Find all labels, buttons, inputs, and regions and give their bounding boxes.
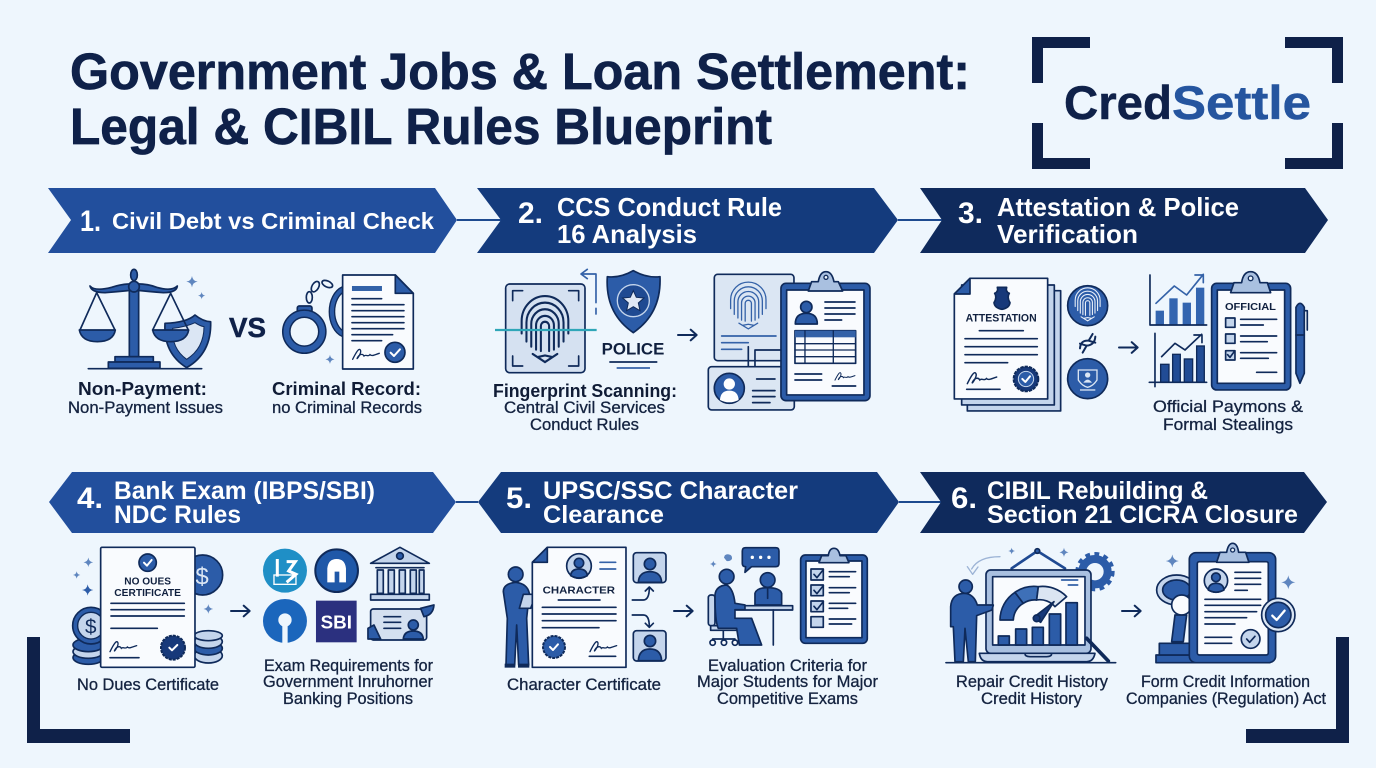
banner 6 <box>920 472 1327 533</box>
icon: no dues certificate with coins: $ <box>85 616 97 639</box>
caption: exam requirements <box>263 657 433 708</box>
caption: non-payment <box>68 378 223 417</box>
icon: handcuffs and record <box>286 275 413 369</box>
panel: 4 bank exam ndc rules <box>49 472 456 708</box>
icon: scales with shield <box>79 269 211 369</box>
logo: CredSettle <box>1032 37 1343 169</box>
icon: evaluation checklist <box>801 548 867 643</box>
banner 2: 2. <box>518 197 543 230</box>
banner 5 <box>478 472 899 533</box>
logo: CredSettle: Settle <box>1172 76 1311 129</box>
connector: 1 to 2 <box>457 219 501 221</box>
caption: credit information act: Form Credit Information <box>1141 673 1310 691</box>
icon: interview scene <box>708 548 793 645</box>
panel: 6 cibil rebuilding and section 21 <box>920 472 1327 708</box>
caption: criminal record: no Criminal Records <box>272 399 422 417</box>
title: Legal & CIBIL Rules Blueprint <box>70 98 772 155</box>
vs label: VS <box>229 312 266 343</box>
caption: official paymons: Official Paymons & <box>1153 398 1303 416</box>
icon: no dues certificate with coins: $ <box>195 563 209 590</box>
icon: banks and exam logos <box>263 547 434 643</box>
caption: fingerprint scanning: Conduct Rules <box>530 416 639 434</box>
icon: official clipboard and pen <box>1212 272 1307 390</box>
arrow <box>1122 606 1141 616</box>
logo: CredSettle: Cred <box>1064 76 1172 129</box>
caption: exam requirements: Banking Positions <box>283 690 413 708</box>
icon: attestation document: ATTESTATION <box>966 313 1037 325</box>
caption: repair credit history: Credit History <box>981 690 1083 708</box>
banner 3: Attestation & Police <box>997 192 1239 222</box>
caption: credit information act: Companies (Regulation) Act <box>1126 690 1326 708</box>
caption: official paymons: Formal Stealings <box>1163 416 1293 434</box>
caption: non-payment: Non-Payment Issues <box>68 399 223 417</box>
panel: 5 upsc ssc character clearance <box>478 472 899 708</box>
banner 3 <box>920 188 1328 253</box>
banner 1: 1. <box>80 205 101 238</box>
icon: regulation clipboard <box>1156 543 1295 663</box>
caption: evaluation criteria: Major Students for Major <box>697 673 879 691</box>
banner 2 <box>477 188 898 253</box>
panel: 2 ccs conduct rule <box>477 188 898 434</box>
banner 3: Verification <box>997 219 1138 249</box>
caption: credit information act <box>1126 673 1326 708</box>
banner 1 <box>48 188 457 253</box>
caption: fingerprint scanning <box>493 380 677 434</box>
caption: fingerprint scanning: Central Civil Services <box>504 399 665 417</box>
caption: repair credit history: Repair Credit History <box>956 673 1109 691</box>
corner bracket: bottom left <box>27 637 130 743</box>
icon: police badge <box>602 271 664 368</box>
corner bracket: bottom right <box>1246 637 1349 743</box>
icon: credit score repair <box>946 548 1116 663</box>
arrow <box>678 330 697 340</box>
icon: fingerprint scanner <box>495 269 597 373</box>
banner 5: 5. <box>506 482 532 515</box>
banner 4: 4. <box>77 482 103 515</box>
caption: non-payment: Non-Payment: <box>78 378 207 399</box>
arrow <box>1119 342 1138 353</box>
caption: evaluation criteria: Evaluation Criteria for <box>708 657 868 675</box>
icon: police badge: POLICE <box>602 339 664 358</box>
caption: repair credit history <box>956 673 1109 708</box>
icon: no dues certificate with coins: NO OUES <box>124 576 172 587</box>
caption: no dues certificate: No Dues Certificate <box>77 676 219 694</box>
banner 6: 6. <box>951 482 977 515</box>
connector: 4 to 5 <box>456 501 478 503</box>
banner 3: 3. <box>958 197 983 230</box>
icon: banks and exam logos: SBI <box>321 611 352 632</box>
title: Government Jobs & Loan Settlement: <box>70 43 970 100</box>
panel: 1 civil debt vs criminal check <box>48 188 457 417</box>
icon: fingerprint records and clipboard <box>708 272 870 410</box>
icon: attestation document <box>954 278 1061 411</box>
panel: 3 attestation and police verification <box>920 188 1328 434</box>
icon: no dues certificate with coins: CERTIFICATE <box>114 588 182 599</box>
caption: exam requirements: Government Inruhorner <box>263 673 433 691</box>
banner 1: Civil Debt vs Criminal Check <box>112 208 434 234</box>
banner 5: Clearance <box>543 501 664 529</box>
caption: criminal record: Criminal Record: <box>272 378 421 399</box>
arrow <box>674 606 693 616</box>
icon: referee portraits <box>632 553 666 661</box>
connector: 2 to 3 <box>898 219 942 221</box>
banner 2: CCS Conduct Rule <box>557 192 782 222</box>
banner 5: UPSC/SSC Character <box>543 477 798 505</box>
title <box>70 43 970 155</box>
icon: no dues certificate with coins <box>73 547 223 667</box>
icon: person with character certificate: CHARACTER <box>543 585 616 596</box>
caption: criminal record <box>272 378 422 417</box>
banner 6: CIBIL Rebuilding & <box>987 477 1208 505</box>
banner 4: NDC Rules <box>114 501 241 529</box>
caption: evaluation criteria: Competitive Exams <box>717 690 858 708</box>
caption: character certificate: Character Certificate <box>507 676 661 694</box>
icon: verification circles <box>1068 286 1108 399</box>
banner 6: Section 21 CICRA Closure <box>987 501 1298 529</box>
caption: evaluation criteria <box>697 657 879 708</box>
caption: official paymons <box>1153 398 1303 434</box>
caption: exam requirements: Exam Requirements for <box>264 657 433 675</box>
banner 2: 16 Analysis <box>557 219 697 249</box>
icon: charts <box>1149 274 1207 387</box>
banner 4 <box>49 472 456 533</box>
connector: 5 to 6 <box>899 501 941 503</box>
icon: person with character certificate <box>503 547 626 668</box>
icon: official clipboard and pen: OFFICIAL <box>1225 302 1276 313</box>
banner 4: Bank Exam (IBPS/SBI) <box>114 477 375 505</box>
arrow <box>231 606 250 616</box>
caption: fingerprint scanning: Fingerprint Scanning: <box>493 380 677 401</box>
